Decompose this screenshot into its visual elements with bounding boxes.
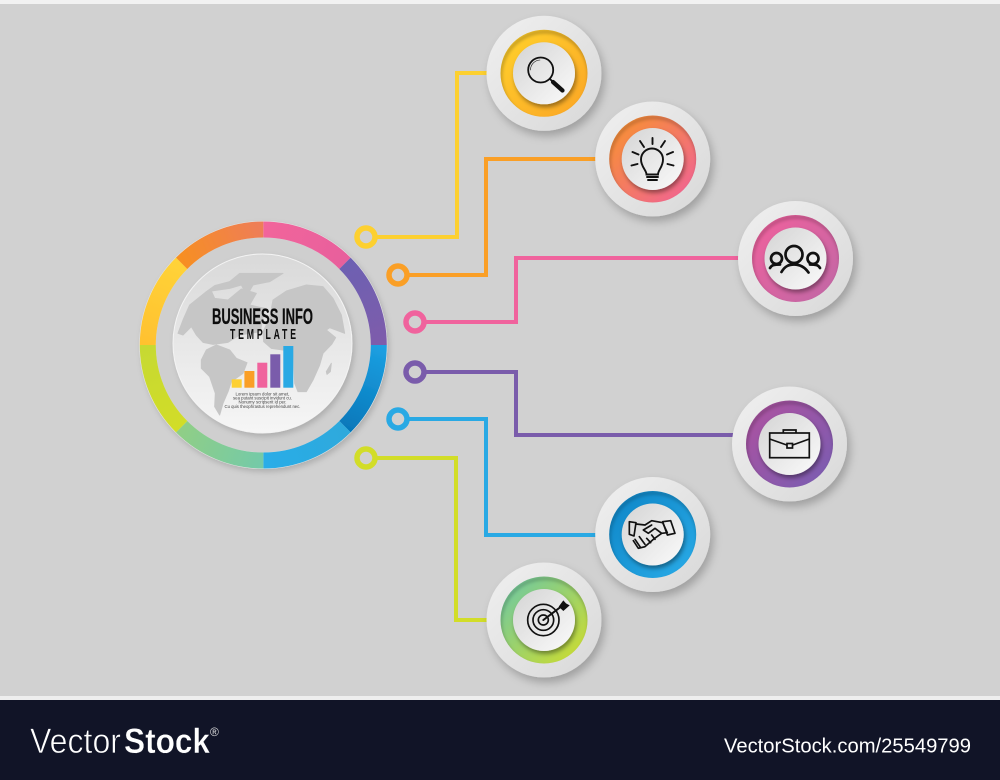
bottom light strip bbox=[0, 696, 1000, 700]
node: target bbox=[486, 562, 602, 678]
icon: magnifying glass bbox=[528, 58, 562, 90]
footer bar bbox=[0, 700, 1000, 780]
connector: lime bbox=[357, 449, 488, 620]
node: team bbox=[738, 201, 853, 316]
footer logo: ® bbox=[210, 725, 219, 739]
connector: yellow bbox=[357, 73, 488, 246]
lorem text block: Lorem ipsum dolor sit amet, bbox=[236, 392, 290, 396]
icon: handshake bbox=[629, 521, 675, 548]
node: briefcase bbox=[732, 386, 847, 502]
icon: target with arrow bbox=[528, 600, 570, 636]
top light strip bbox=[0, 0, 1000, 4]
central disc bbox=[173, 254, 352, 433]
node: idea bbox=[595, 102, 710, 216]
node: handshake bbox=[595, 477, 710, 592]
connector: purple bbox=[406, 363, 734, 435]
bar chart bbox=[232, 346, 293, 388]
title: business info: BUSINESS INFO bbox=[212, 304, 313, 329]
icon: people bbox=[770, 246, 820, 272]
node: search bbox=[486, 16, 602, 131]
footer logo bbox=[30, 722, 219, 761]
lorem text block: sea putant suscipit invidunt cu. bbox=[233, 396, 292, 401]
central multicolor ring bbox=[139, 221, 387, 469]
connector: pink bbox=[406, 258, 739, 331]
footer logo: Stock bbox=[124, 722, 210, 761]
title: template: TEMPLATE bbox=[230, 326, 296, 343]
connector: orange bbox=[389, 159, 597, 284]
footer image id: VectorStock.com/25549799 bbox=[724, 736, 971, 758]
lorem text block: Nonumy scripserit id per. bbox=[238, 400, 286, 405]
footer logo: Vector bbox=[30, 722, 121, 761]
icon: light bulb bbox=[632, 138, 674, 180]
lorem text block: Cu quis theophrastus reprehendunt nec. bbox=[224, 404, 300, 409]
icon: briefcase bbox=[770, 430, 809, 458]
world map bbox=[178, 273, 345, 415]
connector: blue bbox=[389, 410, 597, 535]
lorem text block bbox=[224, 392, 300, 409]
